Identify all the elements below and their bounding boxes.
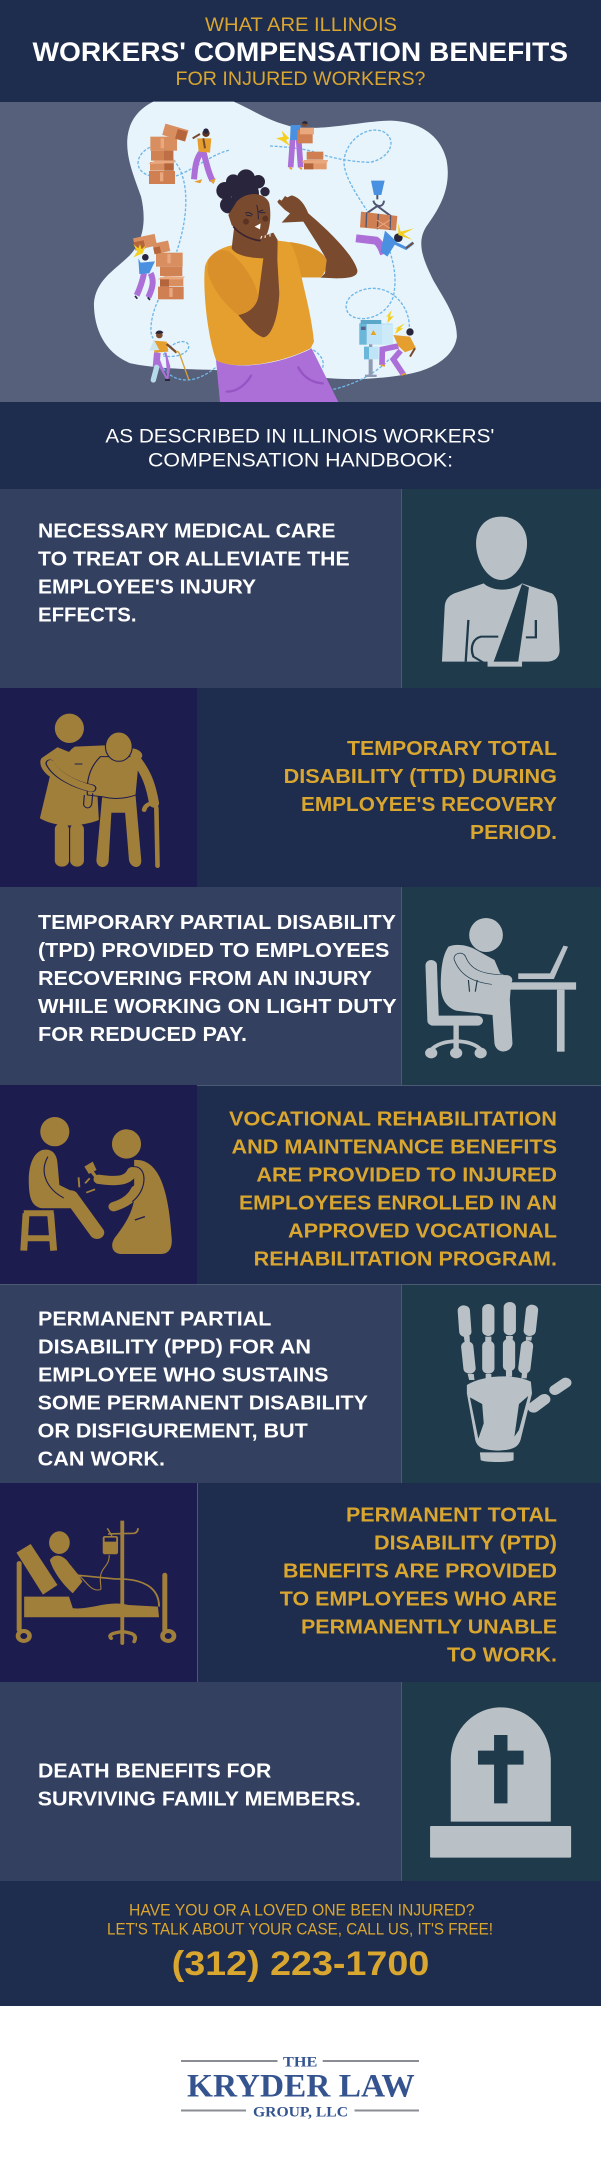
subheading (0, 402, 601, 489)
panel: vocational rehabilitation (0, 1085, 601, 1284)
text: PTD: DISABILITY (PTD) (374, 1532, 557, 1555)
text: vocational rehabilitation: REHABILITATION PROGRAM. (254, 1248, 557, 1271)
title header (0, 0, 601, 102)
text: TTD (284, 737, 557, 844)
text: vocational rehabilitation: VOCATIONAL REHABILITATION (229, 1108, 557, 1131)
text: TPD (38, 911, 397, 1046)
panel: death benefits (0, 1682, 601, 1881)
text: TTD: TEMPORARY TOTAL (347, 737, 557, 760)
text: medical care: EFFECTS. (38, 603, 136, 626)
logo: The Kryder Law Group: THE (283, 2055, 317, 2071)
subheading: COMPENSATION HANDBOOK: (148, 451, 453, 472)
right side workers (270, 121, 416, 389)
panel: permanent total disability (0, 1483, 601, 1682)
text: TPD: TEMPORARY PARTIAL DISABILITY (38, 911, 396, 934)
figure: man with cane (149, 331, 189, 380)
panel: temporary partial disability (0, 887, 601, 1085)
text: PPD: EMPLOYEE WHO SUSTAINS (38, 1364, 328, 1387)
text: vocational rehabilitation: APPROVED VOCATIONAL (288, 1220, 557, 1243)
text: TTD: EMPLOYEE'S RECOVERY (301, 793, 557, 816)
dashed path left (138, 147, 230, 380)
logo: The Kryder Law Group (181, 2055, 419, 2121)
phone number: (312) 223-1700 (172, 1945, 429, 1983)
text: PPD: CAN WORK. (38, 1448, 165, 1471)
background blob (94, 102, 457, 379)
figure: woman under falling boxes (133, 234, 185, 300)
illustration panel (0, 102, 601, 402)
text: PPD: SOME PERMANENT DISABILITY (38, 1392, 368, 1415)
call to action footer (0, 1881, 601, 2006)
icon: caregiver and elderly patient (40, 714, 158, 867)
icon: prosthetic hand (464, 1307, 566, 1462)
text: PTD: TO EMPLOYEES WHO ARE (280, 1588, 557, 1611)
text: TPD: WHILE WORKING ON LIGHT DUTY (38, 995, 397, 1018)
main worried figure (204, 169, 357, 402)
figure: crane and falling worker (356, 181, 414, 257)
title header: FOR INJURED WORKERS? (176, 69, 426, 90)
text: TTD: PERIOD. (470, 821, 557, 844)
dashed path right (270, 130, 409, 389)
call to action footer: LET'S TALK ABOUT YOUR CASE, CALL US, IT'S FREE! (107, 1920, 493, 1938)
text: death benefits: DEATH BENEFITS FOR (38, 1760, 272, 1783)
text: TPD: RECOVERING FROM AN INJURY (38, 967, 372, 990)
text: medical care: TO TREAT OR ALLEVIATE THE (38, 547, 350, 570)
figure: electric cabinet worker (359, 310, 416, 377)
title header: WORKERS' COMPENSATION BENEFITS (32, 37, 568, 67)
icon: doctor testing knee reflex (24, 1117, 172, 1254)
text: PTD: TO WORK. (447, 1644, 557, 1667)
text: PPD (38, 1308, 368, 1471)
text: vocational rehabilitation: EMPLOYEES ENROLLED IN AN (239, 1192, 557, 1215)
text: death benefits: SURVIVING FAMILY MEMBERS. (38, 1788, 361, 1811)
text: medical care: NECESSARY MEDICAL CARE (38, 519, 335, 542)
figure: woman beside falling boxes (148, 124, 215, 184)
text: TTD: DISABILITY (TTD) DURING (284, 765, 557, 788)
icon: patient in hospital bed with IV (16, 1521, 174, 1643)
text: PTD: BENEFITS ARE PROVIDED (283, 1560, 557, 1583)
text: medical care: EMPLOYEE'S INJURY (38, 575, 256, 598)
text: PTD: PERMANENTLY UNABLE (301, 1616, 557, 1639)
logo: The Kryder Law Group: GROUP, LLC (253, 2105, 348, 2121)
panel: permanent partial disability (0, 1284, 601, 1483)
icon: person with arm sling (442, 517, 560, 667)
text: death benefits (38, 1760, 361, 1811)
icon: person at desk (425, 918, 576, 1058)
panel: medical care (0, 489, 601, 688)
text: vocational rehabilitation: ARE PROVIDED TO INJURED (256, 1164, 557, 1187)
icon: gravestone with cross (430, 1707, 571, 1858)
text: PTD: PERMANENT TOTAL (346, 1504, 557, 1527)
logo: The Kryder Law Group: KRYDER LAW (187, 2069, 415, 2105)
title header: WHAT ARE ILLINOIS (205, 15, 397, 36)
call to action footer: HAVE YOU OR A LOVED ONE BEEN INJURED? (129, 1902, 474, 1920)
figure: man carrying box (276, 121, 328, 169)
text: vocational rehabilitation (229, 1108, 557, 1271)
text: TPD: (TPD) PROVIDED TO EMPLOYEES (38, 939, 389, 962)
panel: temporary total disability (0, 688, 601, 887)
text: PTD (280, 1504, 557, 1667)
left side workers (133, 124, 230, 380)
subheading: AS DESCRIBED IN ILLINOIS WORKERS' (105, 427, 494, 448)
text: PPD: OR DISFIGUREMENT, BUT (38, 1420, 308, 1443)
text: PPD: DISABILITY (PPD) FOR AN (38, 1336, 311, 1359)
text: PPD: PERMANENT PARTIAL (38, 1308, 271, 1331)
text: medical care (38, 519, 350, 626)
text: TPD: FOR REDUCED PAY. (38, 1023, 247, 1046)
text: vocational rehabilitation: AND MAINTENANCE BENEFITS (232, 1136, 557, 1159)
